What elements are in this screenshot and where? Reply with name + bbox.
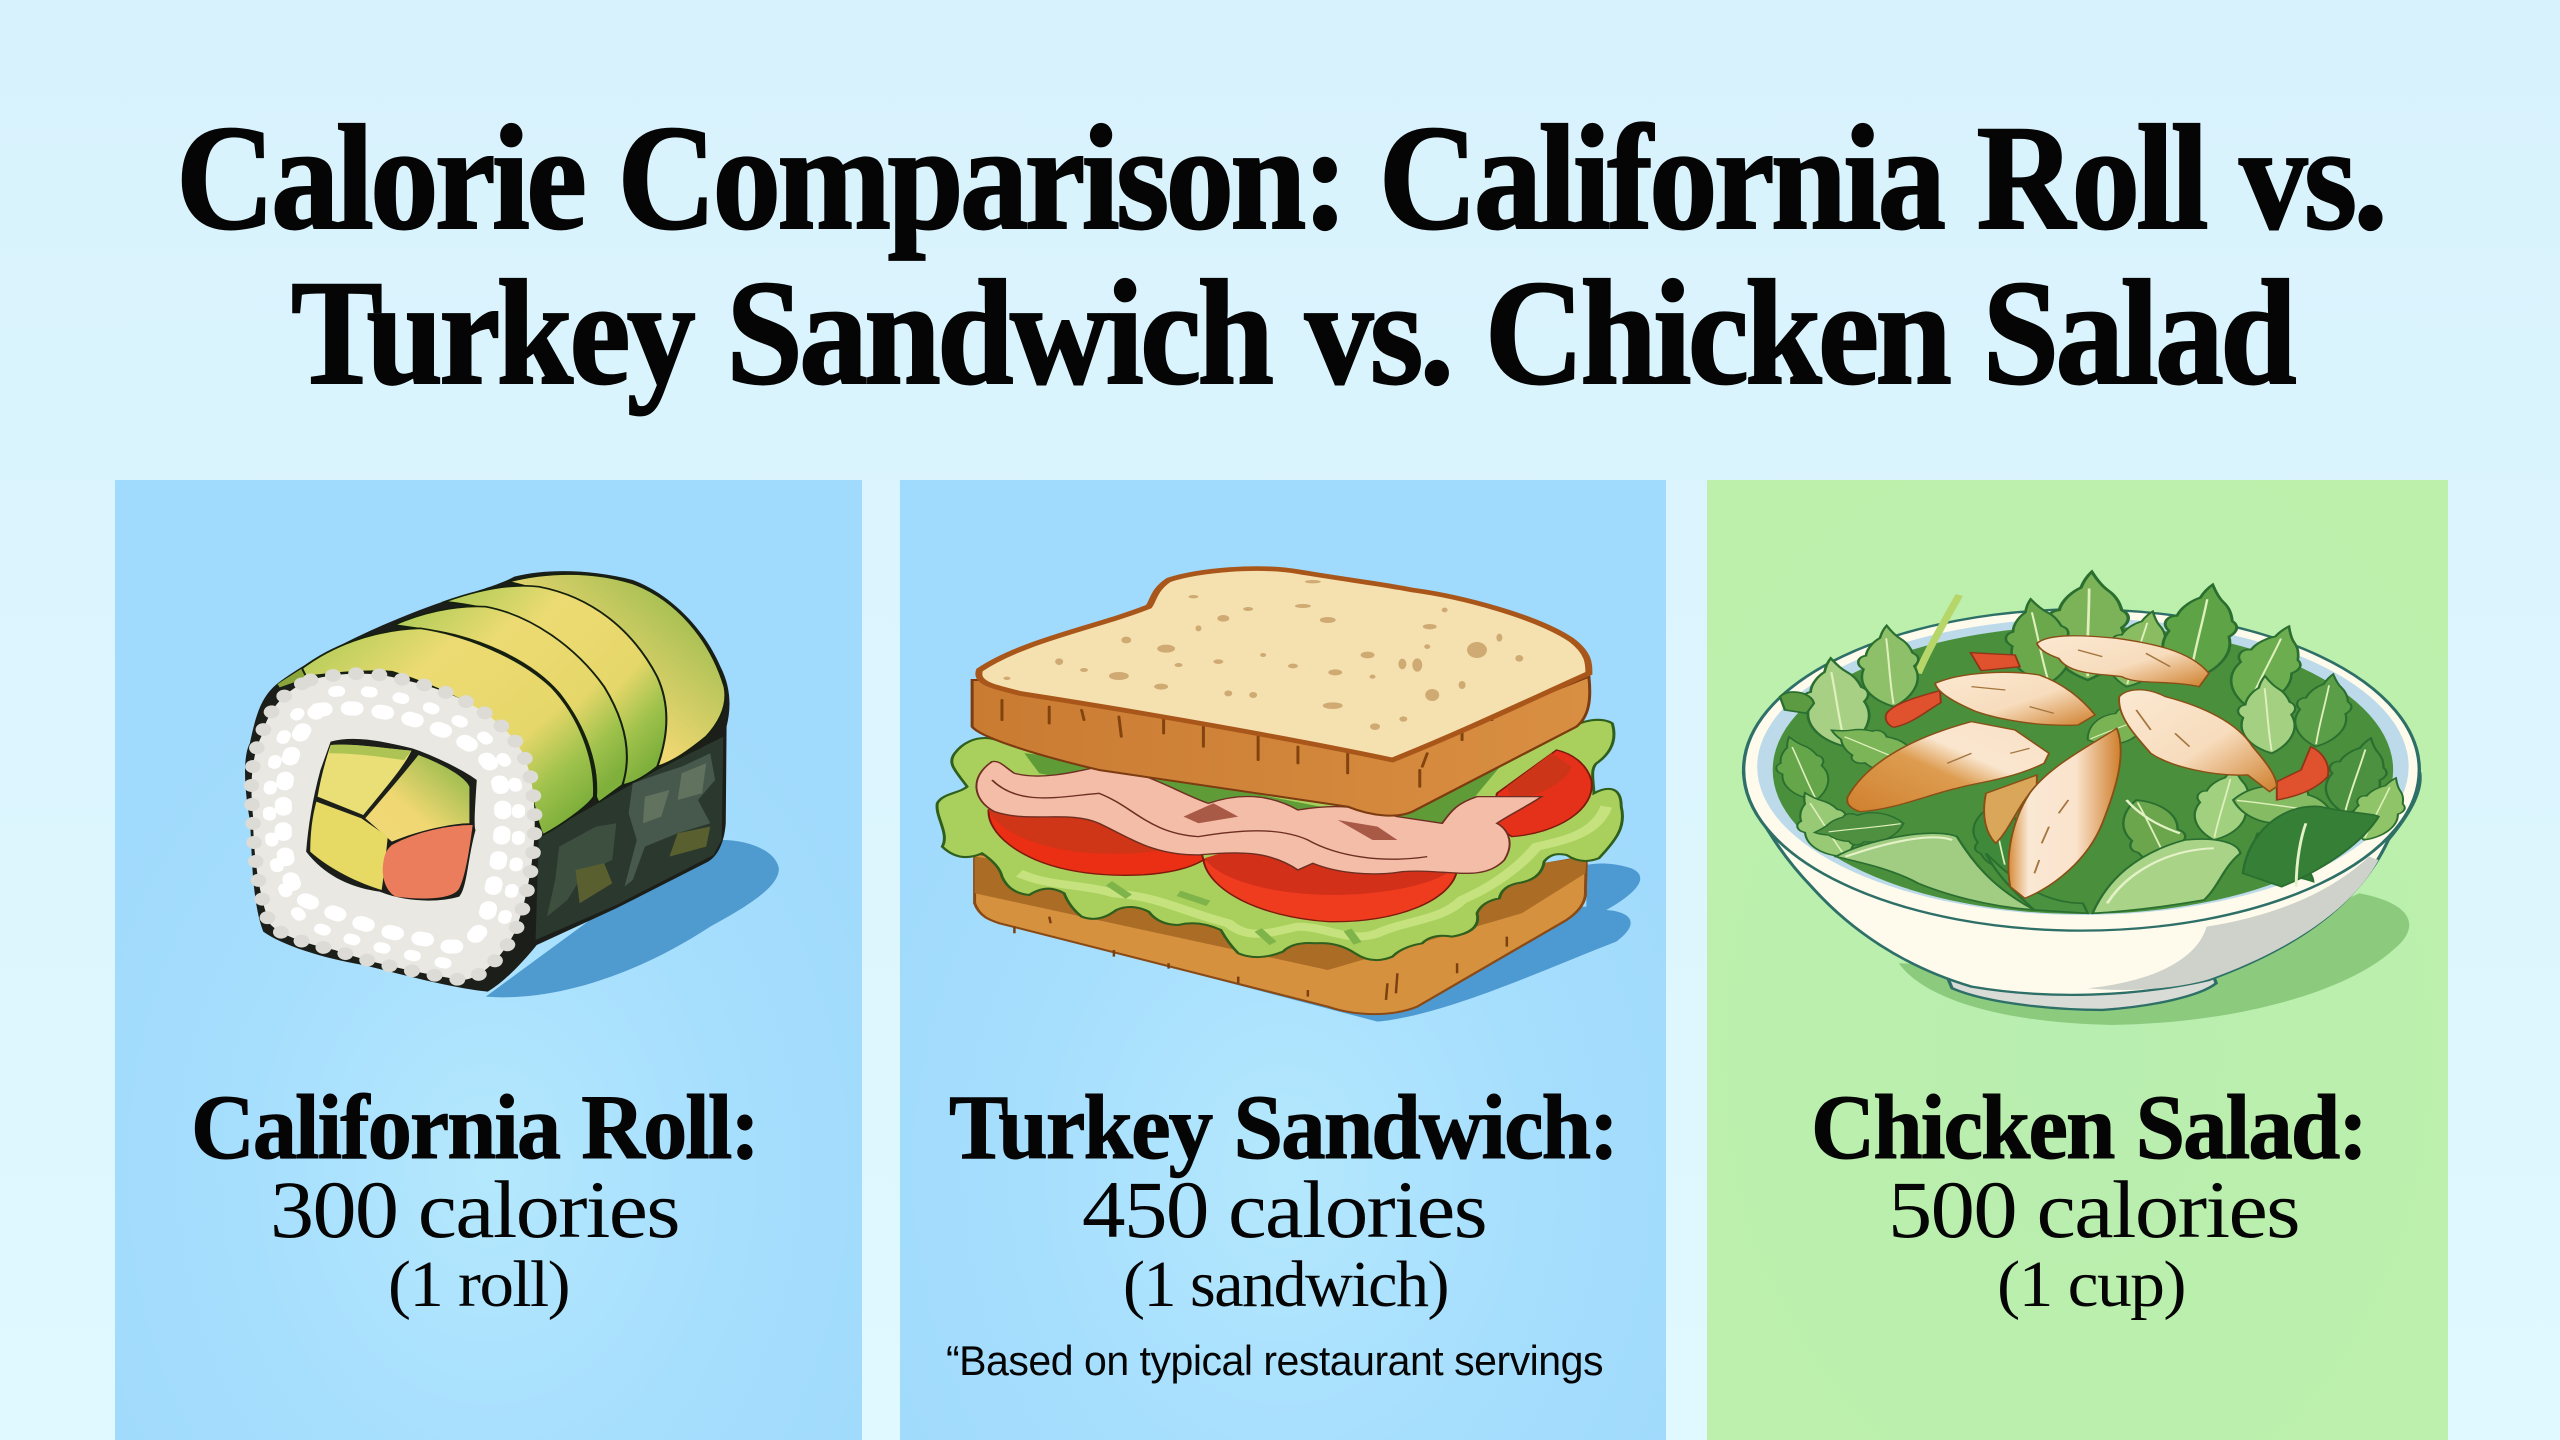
label: California Roll: California Roll: [191, 1076, 758, 1178]
icon: chicken salad [1744, 572, 2420, 1025]
panel background: Chicken Salad [1707, 480, 2448, 1440]
title: Turkey Sandwich vs. Chicken Salad [291, 250, 2295, 416]
label: Turkey Sandwich [949, 1076, 1617, 1321]
tomato pieces [1886, 653, 2328, 800]
panel: Turkey Sandwich [900, 480, 1666, 1440]
label: Chicken Salad [1811, 1076, 2366, 1321]
label: Turkey Sandwich: 450 calories [1082, 1164, 1486, 1255]
panel: Chicken Salad [1707, 480, 2448, 1440]
title [176, 95, 2384, 416]
label: Chicken Salad: (1 cup) [1997, 1248, 2185, 1321]
icon: california roll [245, 571, 779, 997]
panel background: Turkey Sandwich [900, 480, 1666, 1440]
footnote: “Based on typical restaurant servings [946, 1337, 1603, 1384]
label: California Roll: 300 calories [270, 1164, 679, 1255]
title: Calorie Comparison: California Roll vs. [176, 95, 2384, 261]
label: Turkey Sandwich: (1 sandwich) [1123, 1248, 1448, 1321]
label: Turkey Sandwich: Turkey Sandwich: [949, 1076, 1617, 1178]
panel: California Roll [115, 480, 862, 1440]
label: Chicken Salad: 500 calories [1888, 1164, 2299, 1255]
label: California Roll [191, 1076, 758, 1321]
salad leaves [1764, 572, 2417, 913]
label: California Roll: (1 roll) [388, 1248, 569, 1321]
panel background: California Roll [115, 480, 862, 1440]
chicken pieces [1847, 636, 2277, 898]
label: Chicken Salad: Chicken Salad: [1811, 1076, 2366, 1178]
icon: turkey sandwich [937, 569, 1640, 1022]
